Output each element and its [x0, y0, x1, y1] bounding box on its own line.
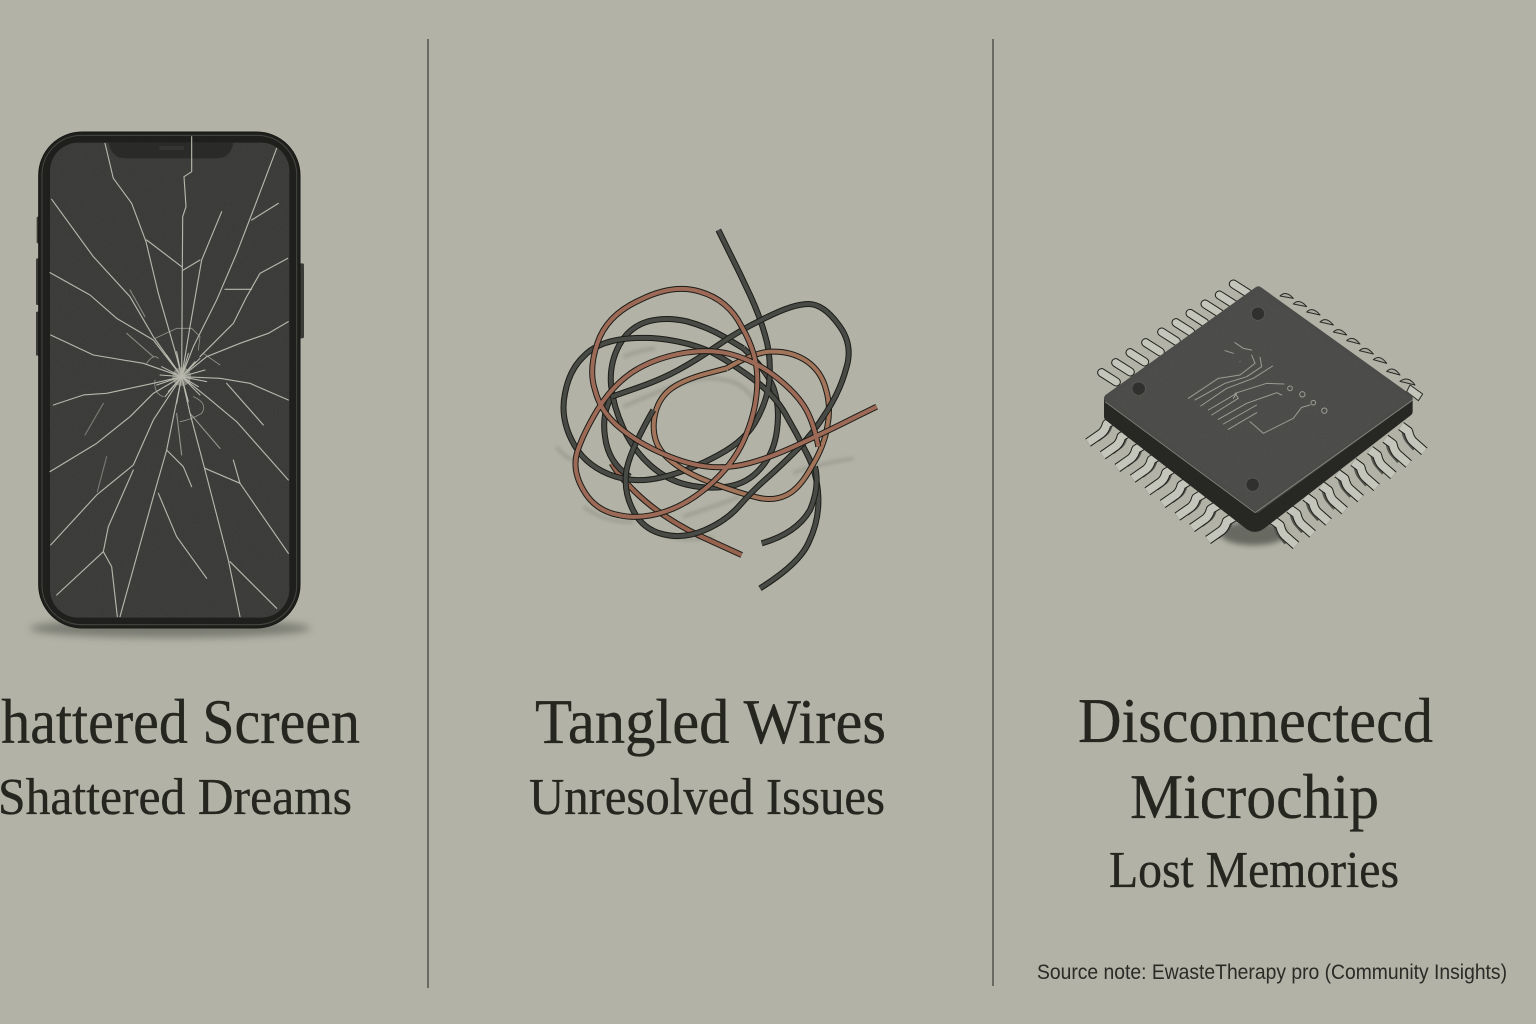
icon: tangled wires [557, 230, 877, 588]
panel: tangled wires [529, 230, 886, 826]
subheading: unresolved issues: Unresolved Issues [529, 769, 885, 826]
subheading: lost memories: Lost Memories [1109, 842, 1399, 899]
icon: microchip [1088, 284, 1424, 545]
panel: shattered screen [0, 132, 360, 826]
heading: tangled wires: Tangled Wires [535, 686, 886, 757]
subheading: shattered dreams: Shattered Dreams [0, 769, 352, 826]
heading: microchip: Microchip [1130, 761, 1379, 832]
heading: disconnectecd: Disconnectecd [1078, 685, 1433, 756]
icon: cracked smartphone [30, 132, 310, 638]
panel: disconnected microchip [1037, 284, 1507, 984]
